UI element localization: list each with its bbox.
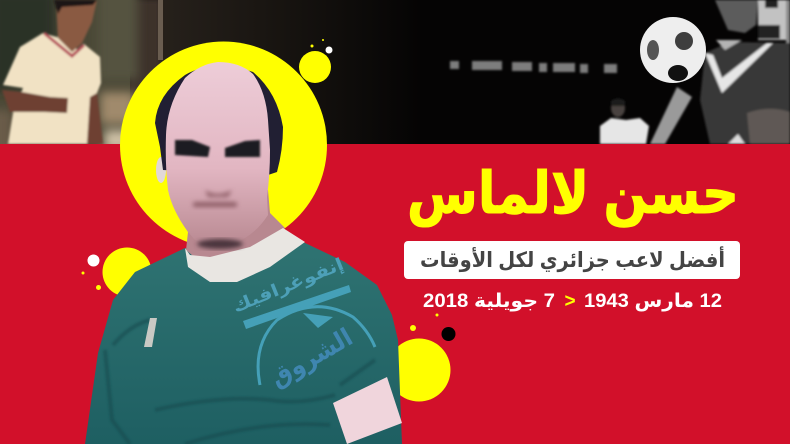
nose and mouth shadows — [193, 190, 237, 207]
dates: 7 جويلية 2018 — [423, 291, 555, 312]
photo strip: top background photos — [0, 0, 790, 155]
title: حسن لالماس — [407, 161, 739, 228]
neck — [168, 190, 285, 262]
shirt crest — [144, 318, 157, 347]
dates: 12 مارس 1943 — [584, 291, 722, 312]
photo: player in cream shirt jogging — [0, 0, 138, 155]
face — [166, 62, 270, 245]
photo: dark stadium background — [130, 0, 617, 144]
watermark: Echorouk infographic logo — [230, 255, 375, 393]
yellow decorative circles — [82, 39, 456, 402]
beard shadow — [197, 239, 243, 249]
subtitle pill — [404, 241, 740, 279]
shirt: green jersey — [85, 242, 402, 444]
portrait: Hassan Lalmas cutout — [85, 62, 402, 444]
red background panel — [0, 144, 790, 444]
ear — [156, 157, 166, 183]
shirt folds — [105, 320, 375, 444]
watermark: Echorouk infographic logo: الشروق — [266, 323, 358, 393]
dates: > — [564, 291, 576, 312]
eyebrows — [175, 140, 260, 157]
photo: football player kicking the ball — [600, 0, 790, 144]
subtitle pill: أفضل لاعب جزائري لكل الأوقات — [420, 245, 725, 273]
armband — [333, 377, 402, 444]
icon: football — [640, 17, 706, 83]
shirt collar — [185, 228, 305, 282]
dates — [423, 291, 722, 312]
hair — [155, 66, 283, 175]
watermark: Echorouk infographic logo: إنفوغرافيك — [230, 255, 347, 317]
